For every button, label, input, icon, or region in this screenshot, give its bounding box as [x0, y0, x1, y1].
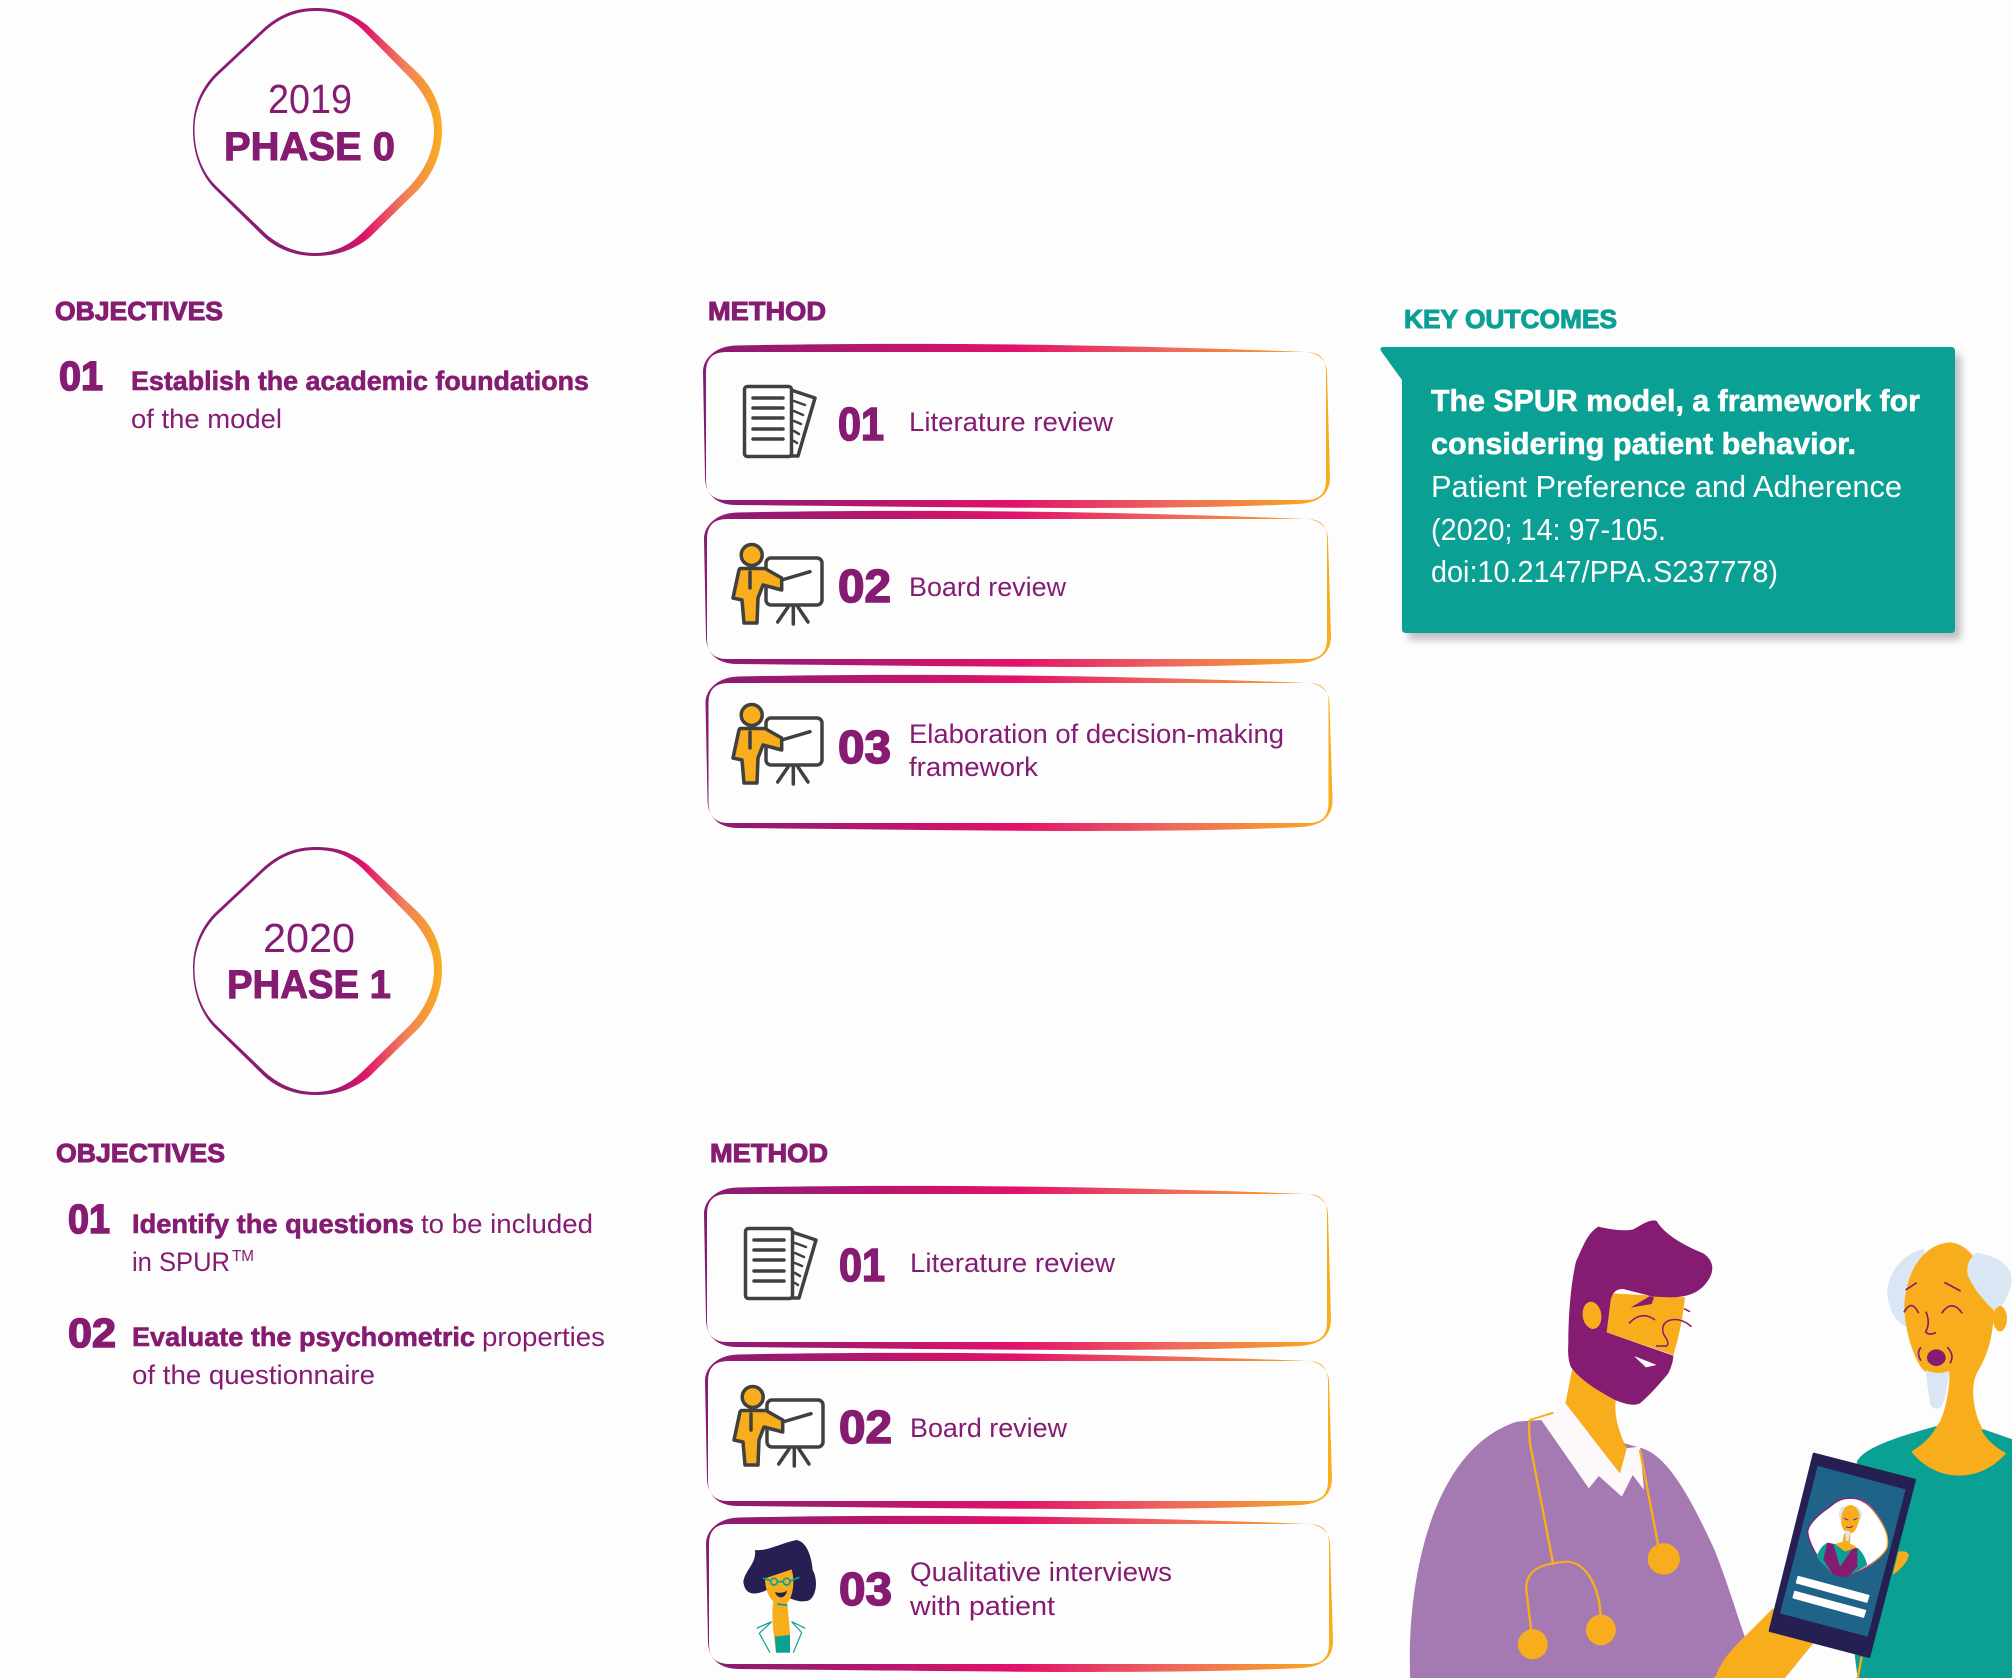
phase 0 objective 01: 01 [59, 353, 103, 399]
phase 1 method card 03: with patient [909, 1591, 1056, 1621]
badge outline: phase 0 [193, 8, 442, 256]
badge outline: phase 1 [193, 847, 442, 1095]
phase 0 objectives heading: OBJECTIVES [55, 296, 223, 326]
phase 0 method card 01 [703, 344, 1330, 508]
phase 1 objective 02: properties [482, 1322, 605, 1352]
phase 1 objective 01 [68, 1196, 593, 1277]
key outcomes callout: Patient Preference and Adherence [1431, 469, 1902, 504]
phase 0 objective 01: of the model [131, 404, 282, 434]
phase 0 method card 03: 03 [838, 721, 891, 773]
phase 0 badge [193, 8, 442, 256]
phase 0 method card 02: 02 [838, 560, 891, 612]
phase 0 objective 01 [59, 353, 589, 434]
badge text: phase 0: PHASE 0 [224, 125, 395, 169]
tablet with patient portrait [1770, 1454, 1915, 1657]
icon: woman with glasses [743, 1540, 816, 1653]
phase 1 method card 01: 01 [839, 1239, 885, 1291]
key outcomes heading: KEY OUTCOMES [1404, 304, 1617, 334]
badge text: phase 1 [227, 915, 391, 1007]
phase 1 badge [193, 847, 442, 1095]
key outcomes callout: The SPUR model, a framework for [1431, 383, 1920, 418]
phase 0 method card 01: 01 [838, 398, 884, 450]
phase 1 objective 02: Evaluate the psychometric [132, 1322, 475, 1352]
key outcomes callout [1380, 347, 1961, 640]
phase 1 objective 01: to be included [421, 1209, 593, 1239]
phase 1 method card 01: Literature review [910, 1248, 1116, 1278]
phase 1 objective 01: in SPUR [132, 1247, 230, 1277]
phase 0 method card 01: Literature review [909, 407, 1114, 437]
doctor head [1568, 1220, 1712, 1405]
phase 1 method card 03: Qualitative interviews [910, 1557, 1172, 1587]
key outcomes callout: doi:10.2147/PPA.S237778) [1431, 554, 1778, 589]
phase 1 objective 01: 01 [68, 1196, 110, 1242]
phase 1 method card 02: 02 [839, 1401, 892, 1453]
phase 0 objective 01: Establish the academic foundations [131, 366, 589, 396]
phase 0 method card 03: framework [909, 752, 1039, 782]
icon: presenter [734, 1386, 823, 1466]
icon: document [746, 1228, 816, 1298]
phase 0 method card 03: Elaboration of decision-making [909, 719, 1284, 749]
badge text: phase 0: 2019 [268, 76, 352, 122]
icon: presenter [733, 544, 822, 624]
illustration: doctor and patient with tablet [1410, 1220, 2012, 1678]
phase 1 objective 01: Identify the questions [132, 1209, 414, 1239]
badge text: phase 1: 2020 [263, 915, 355, 961]
phase 1 method card 03 [706, 1516, 1333, 1672]
phase 1 method card 03: 03 [839, 1563, 892, 1615]
phase 0 method card 02 [704, 511, 1331, 667]
patient head [1887, 1242, 2012, 1430]
icon: document [744, 386, 815, 456]
doctor body [1410, 1367, 1813, 1678]
phase 0 method card 03 [706, 675, 1332, 831]
phase 1 method card 01 [704, 1186, 1331, 1350]
phase 1 method card 02 [705, 1353, 1332, 1509]
phase 1 method card 02: Board review [910, 1413, 1067, 1443]
phase 1 objective 02: of the questionnaire [132, 1360, 375, 1390]
phase 0 method card 02: Board review [909, 572, 1066, 602]
phase 1 objective 02 [68, 1310, 605, 1390]
key outcomes callout: (2020; 14: 97-105. [1431, 512, 1666, 547]
badge text: phase 0 [224, 76, 395, 169]
icon: presenter [733, 704, 822, 784]
phase 1 objective 02: 02 [68, 1310, 116, 1356]
badge text: phase 1: PHASE 1 [227, 963, 391, 1007]
phase 0 method heading: METHOD [708, 296, 826, 326]
phase 1 objective 01: TM [232, 1248, 254, 1265]
key outcomes callout: considering patient behavior. [1431, 426, 1856, 461]
patient body [1855, 1417, 2012, 1678]
phase 1 method heading: METHOD [710, 1138, 828, 1168]
phase 1 objectives heading: OBJECTIVES [56, 1138, 225, 1168]
